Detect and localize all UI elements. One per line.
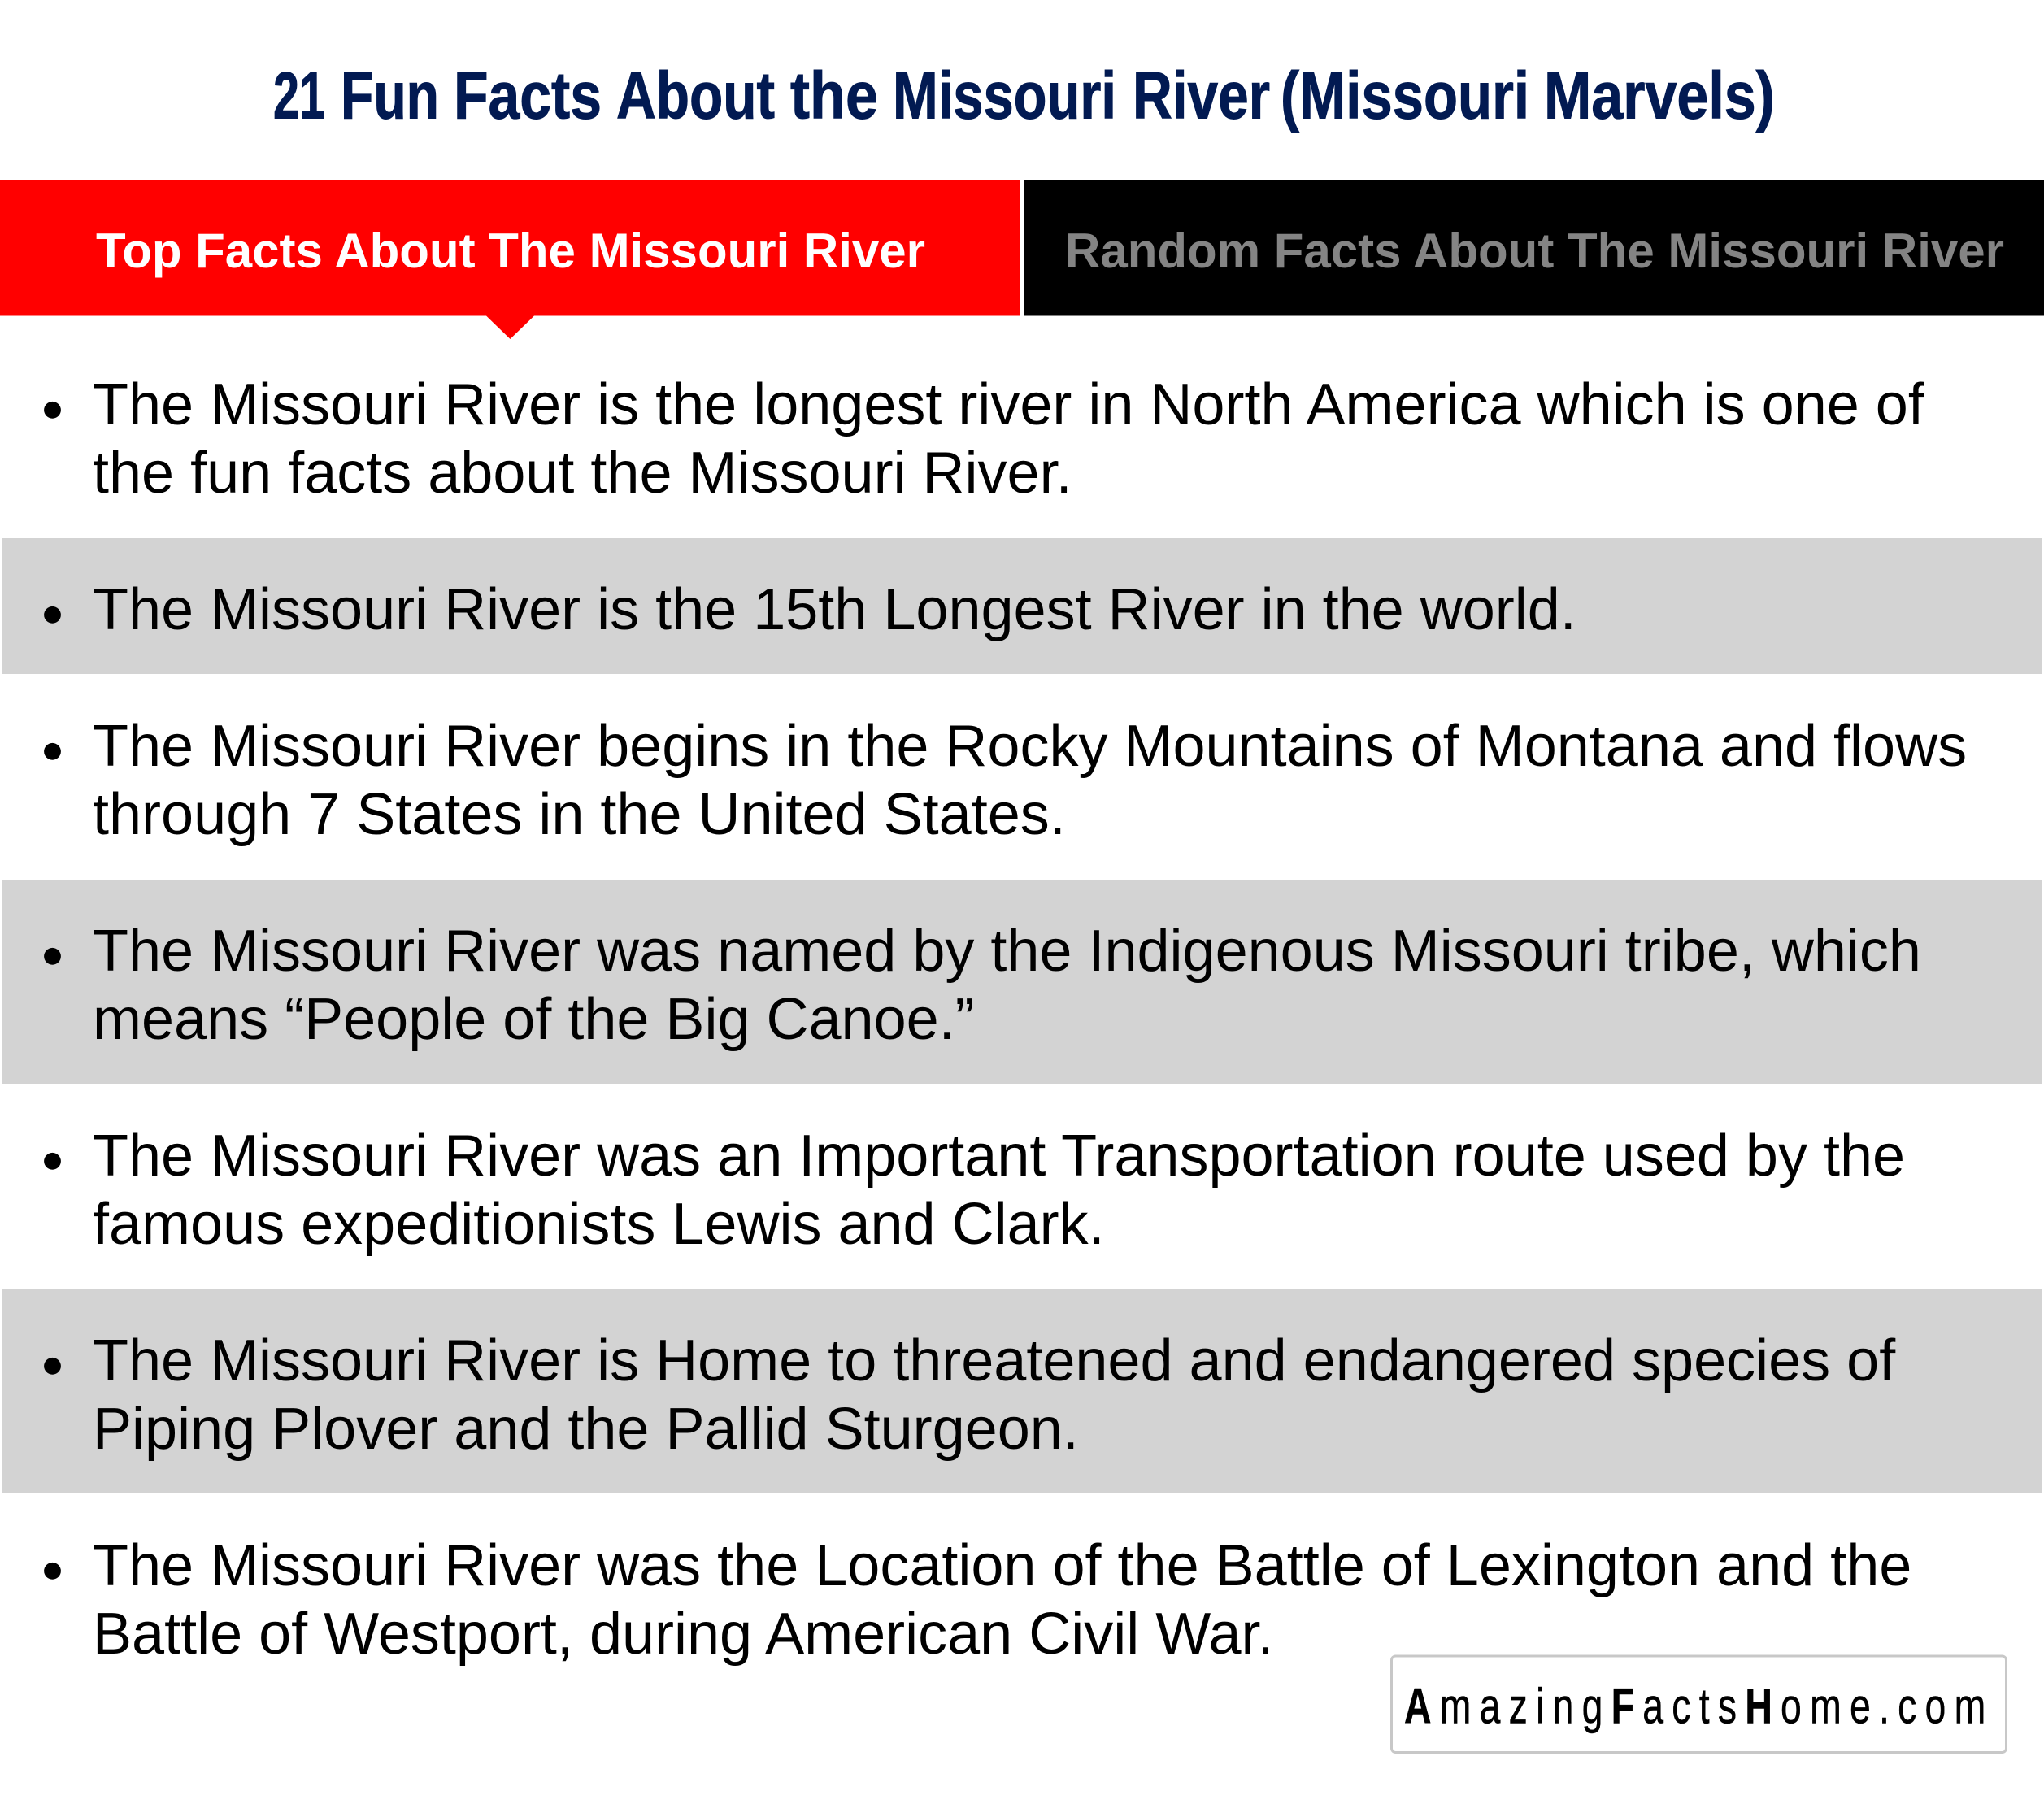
- fact row 4: means “People of the Big Canoe.”: [93, 987, 975, 1052]
- fact row 5: [44, 1124, 1905, 1257]
- title: Marvels): [1544, 59, 1775, 133]
- fact row 2: The Missouri River is the 15th Longest River in the world.: [93, 577, 1576, 642]
- title: 21: [273, 59, 325, 133]
- tab: random facts (inactive): [1024, 180, 2044, 315]
- fact row 6: [2, 1289, 2042, 1493]
- fact row 6: The Missouri River is Home to threatened and endangered species of: [93, 1328, 1896, 1393]
- fact row 6: Piping Plover and the Pallid Sturgeon.: [93, 1397, 1079, 1462]
- fact row 1: [44, 372, 1925, 506]
- fact row 1: The Missouri River is the longest river in North America which is one of: [93, 372, 1925, 437]
- title: Missouri: [893, 59, 1116, 133]
- watermark: AmazingFactsHome.com: AmazingFactsHome.com: [1404, 1679, 1994, 1734]
- fact row 3: [44, 714, 1967, 847]
- title: Facts: [454, 59, 602, 133]
- tab: top facts (active): Top Facts About The Missouri River: [96, 224, 925, 278]
- fact row 5: famous expeditionists Lewis and Clark.: [93, 1192, 1105, 1257]
- watermark: AmazingFactsHome.com: [1392, 1656, 2007, 1753]
- title: Fun: [341, 59, 439, 133]
- fact row 4: [2, 880, 2042, 1084]
- fact row 5: The Missouri River was an Important Transportation route used by the: [93, 1124, 1905, 1189]
- fact row 3: through 7 States in the United States.: [93, 782, 1066, 847]
- fact row 7: [44, 1533, 1911, 1667]
- title: the: [790, 59, 878, 133]
- fact row 1: the fun facts about the Missouri River.: [93, 441, 1072, 506]
- title: About: [616, 59, 775, 133]
- title: (Missouri: [1281, 59, 1529, 133]
- fact row 2: [2, 538, 2042, 674]
- tab: random facts (inactive): Random Facts About The Missouri River: [1065, 224, 2004, 278]
- fact row 3: The Missouri River begins in the Rocky Mountains of Montana and flows: [93, 714, 1967, 779]
- fact row 7: Battle of Westport, during American Civil War.: [93, 1602, 1274, 1667]
- title: [273, 59, 1775, 133]
- title: River: [1133, 59, 1270, 133]
- tab: top facts (active): [0, 180, 1020, 339]
- fact row 7: The Missouri River was the Location of the Battle of Lexington and the: [93, 1533, 1911, 1598]
- fact row 4: The Missouri River was named by the Indigenous Missouri tribe, which: [93, 919, 1921, 984]
